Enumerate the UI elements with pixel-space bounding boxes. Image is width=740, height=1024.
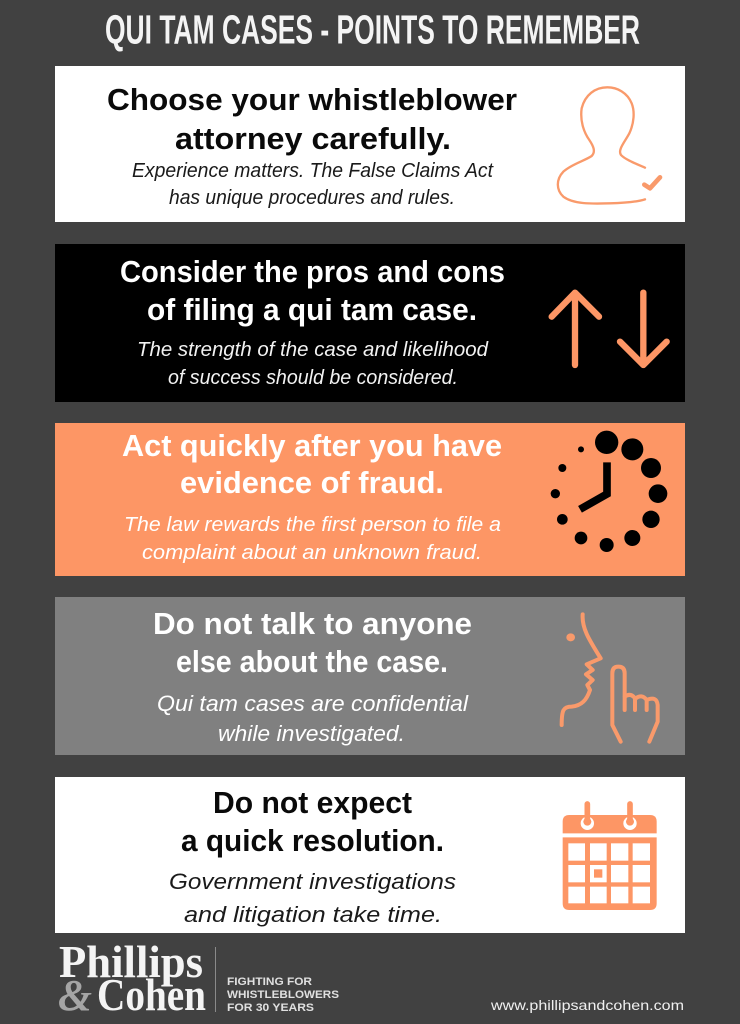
heading: do not talk bbox=[153, 606, 472, 679]
tagline: FOR 30 YEARS bbox=[227, 1002, 314, 1014]
icon: face with finger to lips bbox=[562, 614, 658, 742]
logo: Phillips & Cohen: & bbox=[58, 971, 92, 1020]
text: government investigations: and litigation take time. bbox=[184, 902, 442, 927]
heading: act quickly: evidence of fraud. bbox=[180, 465, 444, 500]
tagline: FIGHTING FOR bbox=[227, 976, 312, 988]
icon: calendar bbox=[563, 804, 657, 910]
website url: www.phillipsandcohen.com bbox=[490, 997, 684, 1013]
logo: Phillips & Cohen: Cohen bbox=[97, 969, 206, 1020]
heading: act quickly: Act quickly after you have bbox=[122, 428, 502, 463]
heading: choose attorney bbox=[107, 82, 517, 156]
text: law rewards bbox=[124, 514, 501, 564]
heading: choose attorney: attorney carefully. bbox=[175, 121, 451, 156]
panel: pros and cons bbox=[55, 244, 685, 402]
text: confidential: Qui tam cases are confidential bbox=[157, 691, 469, 716]
tagline bbox=[227, 976, 339, 1014]
icon: clock with dots bbox=[551, 431, 667, 552]
heading: no quick resolution bbox=[181, 785, 444, 858]
tagline: WHISTLEBLOWERS bbox=[227, 989, 339, 1001]
text: experience matters: Experience matters. The False Claims Act bbox=[132, 160, 494, 182]
text: experience matters: has unique procedures and rules. bbox=[169, 187, 455, 209]
panel: no quick resolution bbox=[55, 777, 685, 933]
icon: up and down arrows bbox=[552, 293, 667, 365]
text: government investigations: Government investigations bbox=[169, 869, 456, 894]
heading: no quick resolution: Do not expect bbox=[213, 785, 412, 820]
panel: choose attorney bbox=[55, 66, 685, 222]
text: experience matters bbox=[132, 160, 494, 209]
text: law rewards: complaint about an unknown fraud. bbox=[142, 542, 482, 564]
heading: pros and cons bbox=[120, 254, 505, 327]
icon: person with check mark bbox=[558, 87, 660, 204]
heading: do not talk: else about the case. bbox=[176, 644, 448, 679]
panel: act quickly bbox=[55, 423, 685, 576]
text: confidential bbox=[157, 691, 469, 746]
heading: choose attorney: Choose your whistleblower bbox=[107, 82, 517, 117]
panel: do not talk bbox=[55, 597, 685, 755]
logo: Phillips & Cohen bbox=[58, 936, 206, 1020]
heading: pros and cons: of filing a qui tam case. bbox=[147, 292, 477, 327]
heading: no quick resolution: a quick resolution. bbox=[181, 823, 444, 858]
heading: act quickly bbox=[122, 428, 502, 500]
heading: pros and cons: Consider the pros and cons bbox=[120, 254, 505, 289]
text: strength of the case: The strength of the case and likelihood bbox=[137, 339, 489, 361]
heading: do not talk: Do not talk to anyone bbox=[153, 606, 472, 641]
text: government investigations bbox=[169, 869, 456, 927]
logo: Phillips & Cohen: Phillips bbox=[59, 936, 203, 987]
text: strength of the case: of success should be considered. bbox=[168, 367, 458, 389]
text: law rewards: The law rewards the first person to file a bbox=[124, 514, 501, 536]
text: strength of the case bbox=[137, 339, 489, 389]
text: confidential: while investigated. bbox=[218, 721, 405, 746]
